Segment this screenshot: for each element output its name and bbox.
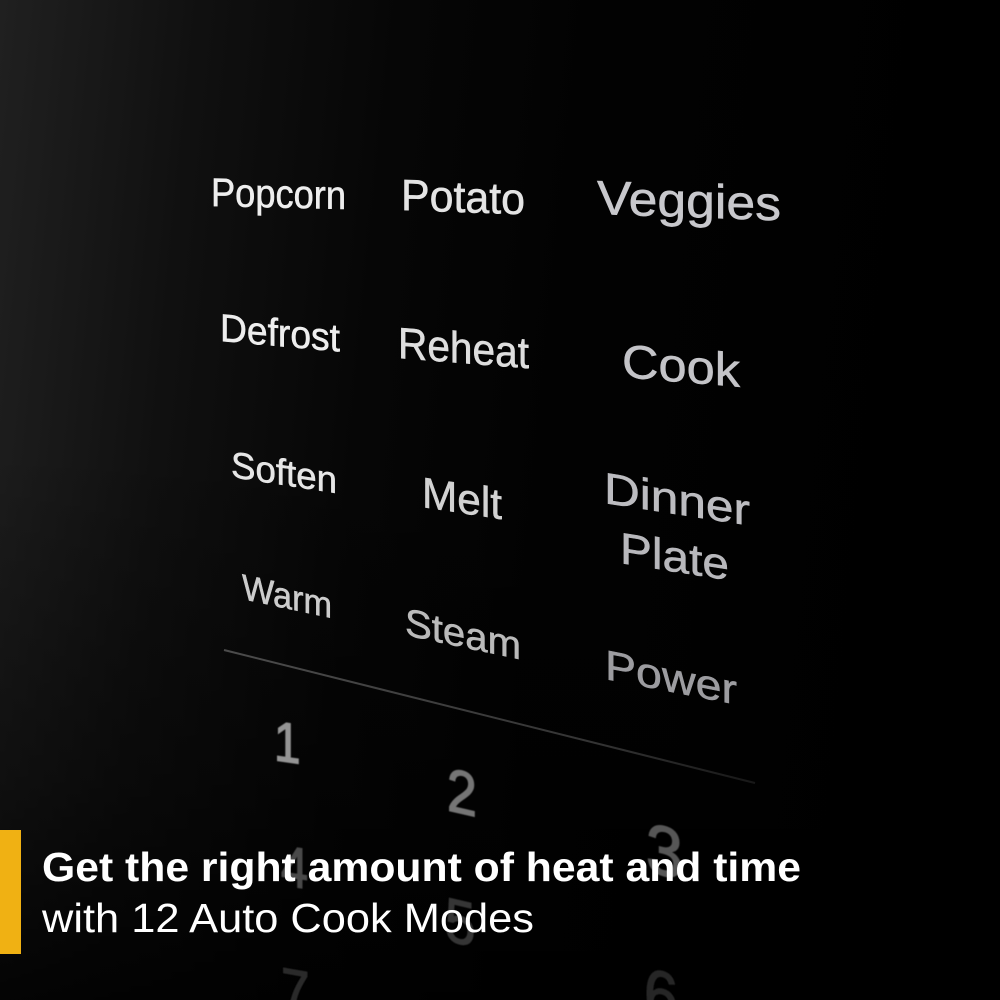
accent bar	[0, 830, 21, 954]
label: Veggies: Veggies	[597, 172, 781, 231]
digit 4: 4	[281, 835, 308, 902]
label: Reheat: Reheat	[398, 319, 529, 378]
digit 3: 3	[646, 807, 683, 895]
caption headline: Get the right amount of heat and time	[42, 844, 801, 890]
divider line	[224, 650, 755, 783]
label: Power: Power	[605, 641, 737, 714]
panel: number keypad	[274, 711, 683, 1000]
label: Warm: Warm	[242, 566, 332, 626]
label: Dinner: Dinner	[604, 464, 750, 536]
label: Melt: Melt	[422, 469, 502, 529]
panel: auto cook mode labels	[211, 171, 781, 714]
label: Popcorn: Popcorn	[211, 171, 346, 218]
label: Plate: Plate	[620, 524, 729, 590]
digit 5: 5	[445, 884, 475, 961]
digit 2: 2	[447, 755, 477, 831]
caption subline: with 12 Auto Cook Modes	[41, 895, 534, 941]
label: Soften: Soften	[231, 443, 337, 501]
label: Cook: Cook	[622, 334, 740, 397]
label: Steam: Steam	[405, 600, 521, 669]
label: Defrost: Defrost	[220, 307, 340, 360]
caption	[41, 844, 801, 941]
label: Potato: Potato	[401, 171, 525, 224]
digit 1: 1	[274, 711, 300, 777]
